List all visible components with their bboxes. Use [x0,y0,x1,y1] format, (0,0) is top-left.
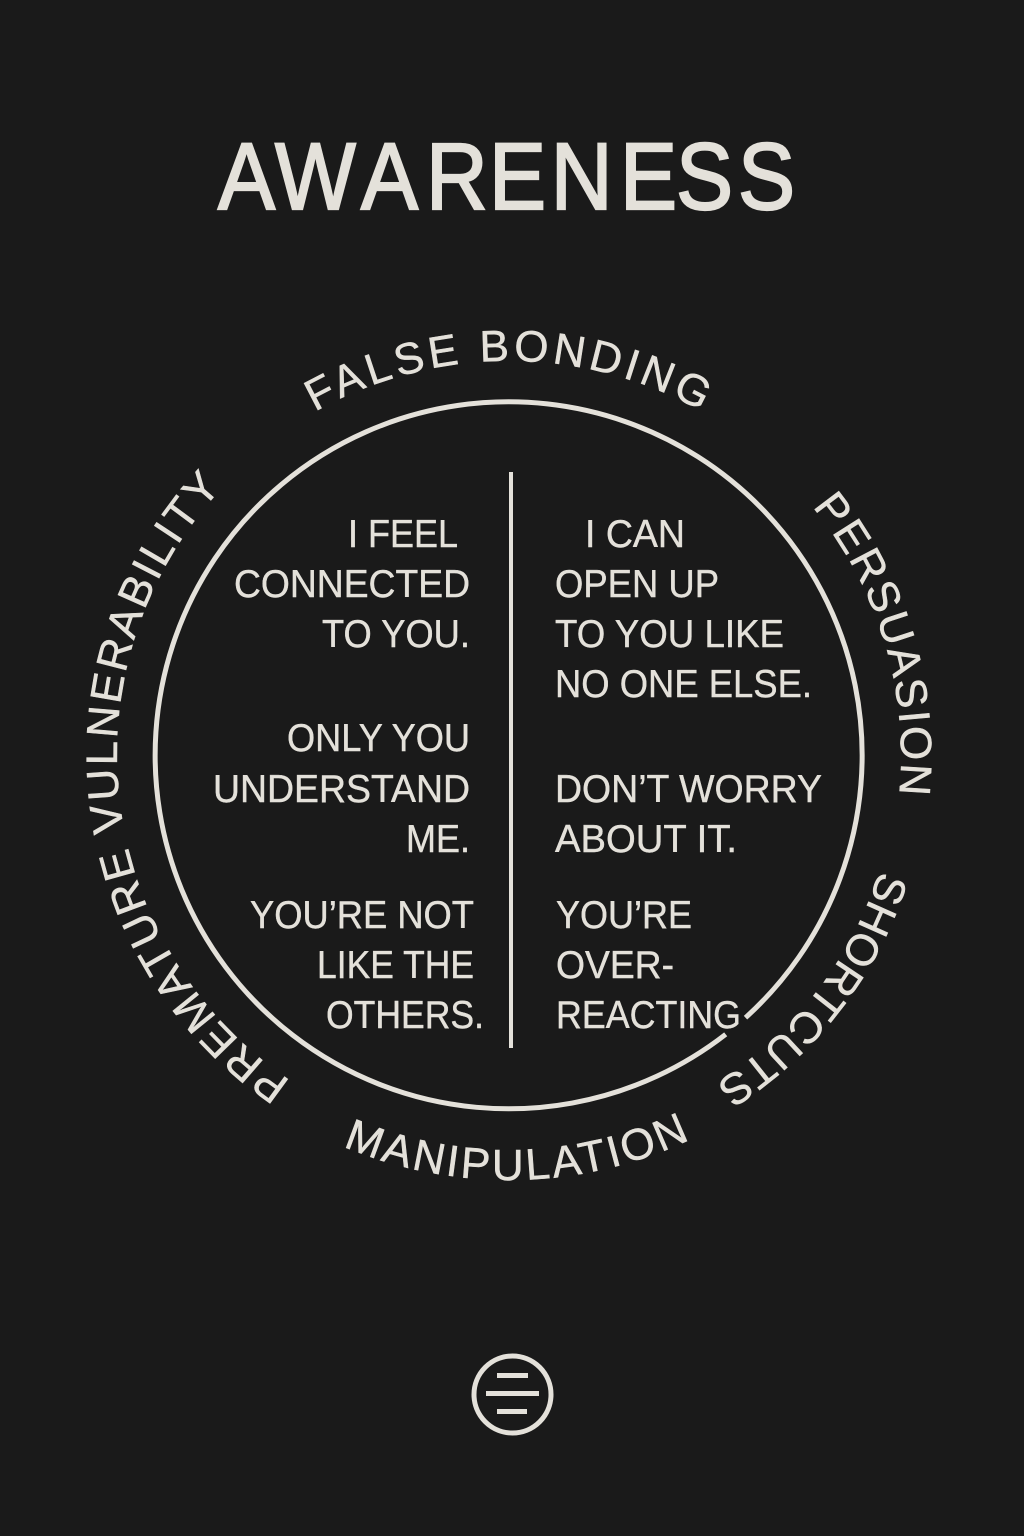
statement: I can open up to you like no one else: TO YOU LIKE [555,613,784,656]
statement: I feel connected to you: TO YOU. [322,613,470,656]
right column statements [555,513,822,1037]
statement: you're over-reacting: OVER- [556,944,674,987]
statement: don't worry about it: DON’T WORRY [555,768,822,811]
statement: I can open up to you like no one else: I CAN [585,513,685,556]
statement: you're over-reacting: YOU’RE [556,894,692,937]
title: AWARENESS [218,124,795,230]
statement: only you understand me: ONLY YOU [287,717,470,760]
statement: only you understand me: UNDERSTAND [213,768,470,811]
statement: I can open up to you like no one else [555,513,812,706]
statement: I can open up to you like no one else: NO ONE ELSE. [555,663,812,706]
statement: don't worry about it: ABOUT IT. [555,818,737,861]
curved label: premature vulnerability: PREMATURE VULNERABILITY [86,468,288,1104]
center divider [509,472,513,1048]
statement: you're over-reacting: REACTING [556,994,741,1037]
curved label: shortcuts: SHORTCUTS [720,874,906,1104]
curved label: manipulation: MANIPULATION [346,1113,688,1181]
statement: only you understand me [213,717,470,861]
left column statements [213,513,484,1037]
statement: I feel connected to you: I FEEL [348,513,458,556]
statement: you're not like the others: LIKE THE [317,944,474,987]
statement: don't worry about it [555,768,822,861]
statement: you're over-reacting [556,894,741,1037]
statement: I feel connected to you: CONNECTED [234,563,470,606]
statement: you're not like the others: OTHERS. [326,994,484,1037]
curved label: false bonding: FALSE BONDING [304,330,710,410]
central circle with gap near the word REACTING [155,402,862,1109]
statement: you're not like the others [250,894,484,1037]
statement: I can open up to you like no one else: OPEN UP [555,563,719,606]
curved label: persuasion: PERSUASION [814,490,932,794]
statement: I feel connected to you [234,513,470,656]
statement: you're not like the others: YOU’RE NOT [250,894,474,937]
icon: circle logo with three bars [474,1356,551,1433]
statement: only you understand me: ME. [406,818,470,861]
